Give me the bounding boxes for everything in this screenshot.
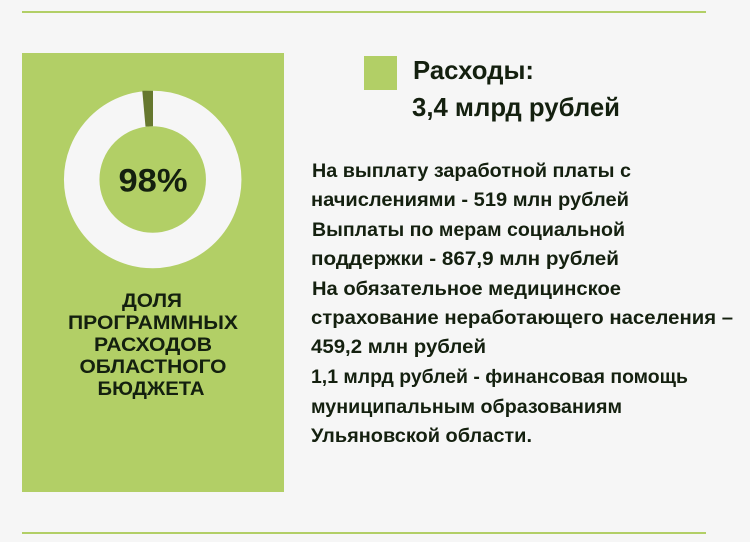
heading: expenditure total — [412, 55, 620, 122]
donut value: 98% — [118, 162, 188, 198]
text block: expenditure breakdown: На обязательное медицинское — [312, 279, 621, 300]
text block: expenditure breakdown — [311, 161, 733, 447]
donut segment: remaining share — [142, 91, 153, 127]
panel caption: БЮДЖЕТА — [98, 379, 205, 400]
text block: expenditure breakdown: Выплаты по мерам социальной — [312, 220, 625, 241]
text block: expenditure breakdown: 459,2 млн рублей — [311, 337, 486, 358]
heading: expenditure total: 3,4 млрд рублей — [412, 92, 620, 122]
heading: expenditure total: Расходы: — [413, 55, 534, 85]
text block: expenditure breakdown: начислениями - 519 млн рублей — [311, 190, 629, 211]
text block: expenditure breakdown: страхование неработающего населения – — [311, 308, 733, 329]
panel caption: ОБЛАСТНОГО — [80, 357, 226, 378]
panel caption: РАСХОДОВ — [94, 335, 212, 356]
text block: expenditure breakdown: 1,1 млрд рублей - финансовая помощь — [311, 367, 688, 388]
text block: expenditure breakdown: На выплату заработной платы с — [312, 161, 631, 182]
text block: expenditure breakdown: муниципальным образованиям — [311, 397, 622, 418]
legend swatch — [364, 56, 397, 90]
panel caption: ДОЛЯ — [122, 291, 182, 312]
panel caption: ПРОГРАММНЫХ — [68, 313, 238, 334]
panel: share of programme expenditure — [22, 53, 284, 492]
text block: expenditure breakdown: Ульяновской области. — [311, 426, 532, 447]
donut chart: 98% — [82, 91, 224, 250]
text block: expenditure breakdown: поддержки - 867,9 млн рублей — [311, 249, 619, 270]
panel caption — [68, 291, 238, 400]
